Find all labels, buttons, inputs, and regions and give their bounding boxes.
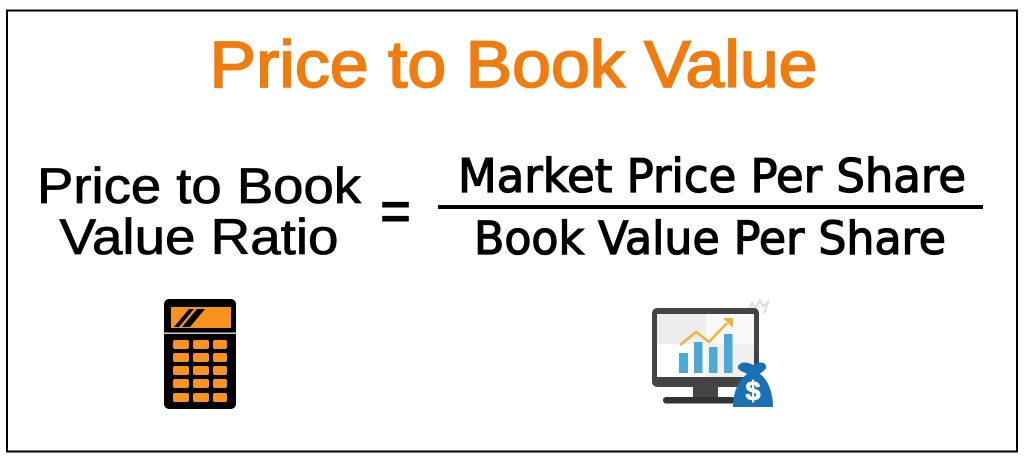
- fraction: [438, 149, 983, 265]
- denominator: Book Value Per Share: [474, 212, 946, 265]
- equals sign: =: [380, 183, 411, 241]
- numerator: Market Price Per Share: [458, 149, 966, 203]
- fraction line: [438, 205, 983, 209]
- icon: monitor with chart and money bag: [652, 300, 773, 407]
- formula label: [37, 158, 362, 265]
- icon: monitor with chart and money bag: $: [745, 376, 761, 406]
- formula label: Price to Book: [37, 158, 362, 214]
- title: Price to Book Value: [210, 27, 818, 101]
- icon: calculator: [164, 299, 236, 409]
- formula label: Value Ratio: [60, 209, 338, 265]
